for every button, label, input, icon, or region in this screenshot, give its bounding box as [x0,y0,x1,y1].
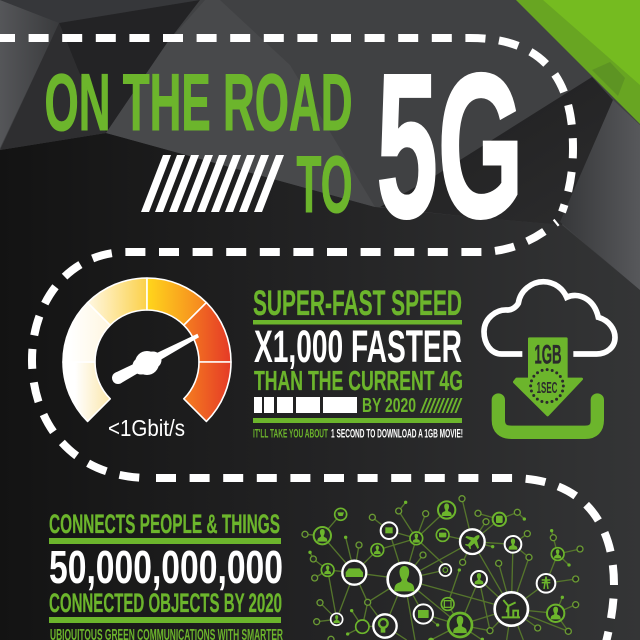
panel: super-fast speed: X1,000 FASTER [254,321,462,372]
white ring node: light bulb [373,614,397,638]
panel: super-fast speed: IT'LL TAKE YOU ABOUT [253,426,328,440]
panel: super-fast speed: SUPER-FAST SPEED [253,284,462,323]
title stripes [141,155,284,212]
progress bars [254,397,357,413]
white ring node: car [342,561,366,585]
white ring node: wind turbine [495,592,528,626]
panel: connects people and things [49,509,283,640]
small stripes [420,398,462,413]
white ring node: person [388,563,421,596]
small empty nodes [302,496,583,640]
title: TO [296,140,352,230]
gauge needle [112,334,199,384]
panel: connects people and things: CONNECTS PEOPLE & THINGS [49,509,280,539]
panel: connects people and things: 50,000,000,000 [49,541,283,593]
green corner [516,0,640,124]
gauge label: <1Gbit/s [108,415,185,441]
panel: super-fast speed: THAN THE CURRENT 4G [254,365,463,396]
panel: super-fast speed: 1 SECOND TO DOWNLOAD A 1GB MOVIE! [331,426,463,440]
small filled dots [308,501,571,640]
white ring node: plane [460,529,485,554]
title: ON THE ROAD [44,58,352,148]
white ring node: pylon [537,574,555,593]
network diagram [302,496,583,640]
green ring nodes [314,501,564,637]
speedometer gauge [63,278,231,441]
panel: super-fast speed [253,284,463,440]
panel: super-fast speed: BY 2020 [362,395,416,417]
panel: connects people and things: CONNECTED OBJECTS BY 2020 [49,588,282,618]
title [44,32,524,260]
white ring nodes: small [331,522,521,625]
icon: cloud download: 1SEC [537,380,558,397]
icon: cloud download: 1GB [534,339,562,369]
icon: cloud download [484,282,615,432]
